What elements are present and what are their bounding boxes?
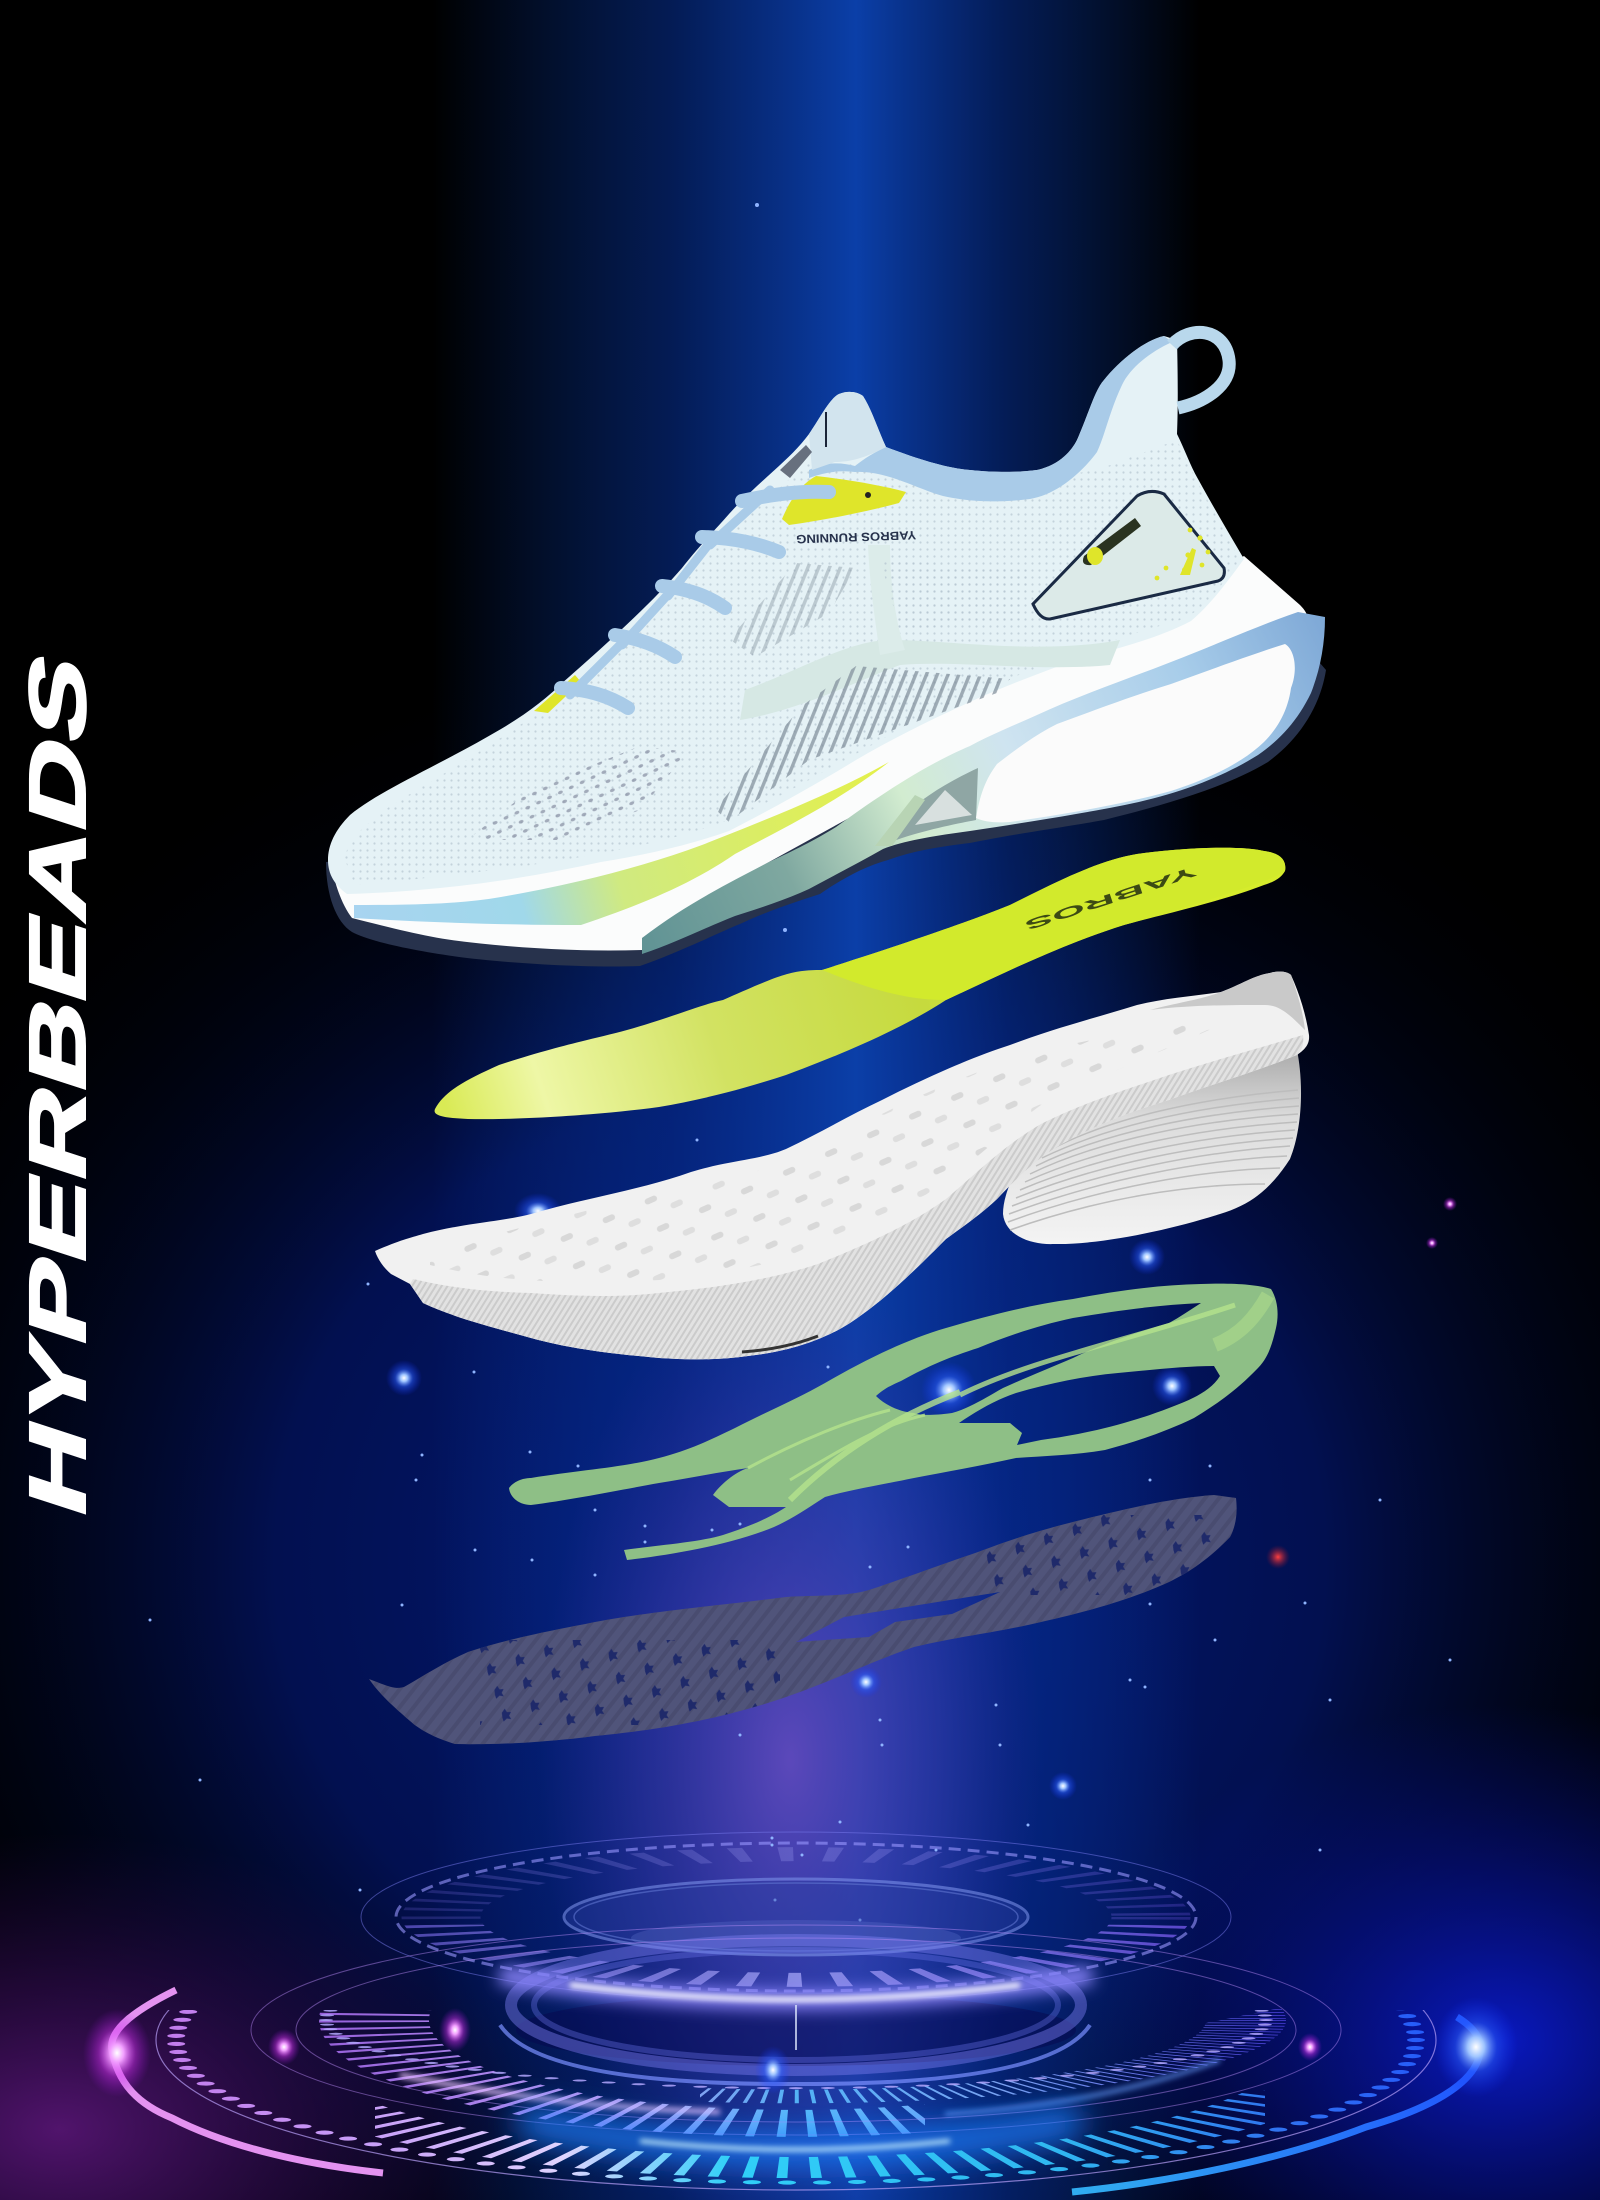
central C rings (500, 1940, 1090, 2084)
stars (148, 203, 1457, 1922)
vent stripes (715, 666, 1010, 822)
vertical light line (795, 2005, 797, 2050)
heel pod (1003, 1050, 1301, 1244)
midsole stripe (354, 762, 889, 925)
heel pod ribs (1008, 1090, 1299, 1230)
rubber outsole (360, 1490, 1240, 1750)
lower glow arc (520, 2120, 1080, 2150)
foam perforations (430, 1020, 1230, 1282)
outsole edge (326, 640, 1326, 967)
foam body (375, 972, 1309, 1359)
mid tier second row (700, 2009, 1286, 2104)
heel cavity (880, 768, 978, 846)
upper ring tier (361, 1832, 1231, 2002)
platform: holographic rings (83, 1832, 1518, 2192)
white heel pod (976, 644, 1295, 822)
mid bright streak (400, 2075, 720, 2112)
shoe (326, 332, 1326, 967)
translucent green plate (509, 1284, 1278, 1560)
plate highlights (748, 1295, 1268, 1500)
tongue (809, 392, 886, 470)
bright arc upper (500, 1975, 1092, 2000)
mesh upper (328, 336, 1244, 894)
overlay panels (740, 640, 1120, 720)
lower glow core (640, 2141, 950, 2150)
flares (83, 1997, 1518, 2097)
insole logo: YABROS (1023, 863, 1199, 934)
brand text: YABROS RUNNING (796, 528, 916, 546)
toe yellow accent (534, 675, 581, 713)
heel badge (1033, 491, 1224, 619)
eyestay yellow patch (782, 476, 906, 525)
laces (561, 490, 829, 708)
outer thin ring (155, 2010, 1437, 2191)
outer right arc (1072, 2017, 1480, 2192)
title: HYPERBEADS: HYPERBEADS (14, 642, 103, 1527)
clear heel unit (642, 612, 1325, 954)
inner thin lines (251, 1925, 1341, 2135)
foam dark edge (742, 1336, 818, 1352)
insole (435, 848, 1285, 1119)
collar (809, 336, 1172, 501)
white midsole (330, 556, 1308, 951)
heel pull loop (1172, 332, 1229, 408)
outer left arc (112, 1990, 383, 2173)
outer bars (375, 2090, 1265, 2178)
foam midsole (375, 972, 1309, 1359)
mid tier bars (319, 2010, 925, 2137)
mid tier dots (319, 2010, 1273, 2090)
heel cup shade (1150, 972, 1305, 1030)
foam side ribbing (410, 1035, 1303, 1359)
outer dots (167, 2010, 1425, 2185)
